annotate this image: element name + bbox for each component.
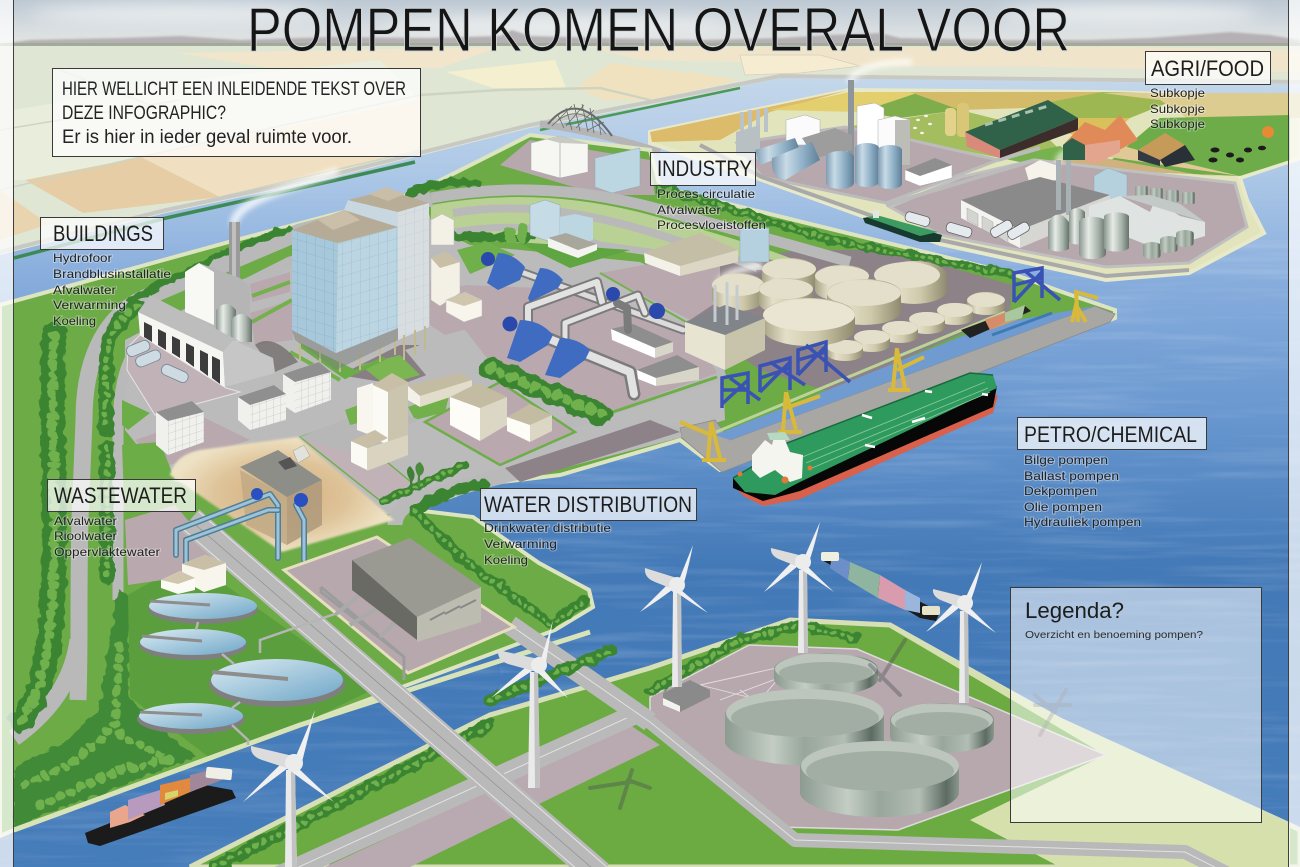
intro text box — [52, 68, 420, 156]
label: agri/food: AGRI/FOOD — [1151, 56, 1264, 81]
jetty quay — [680, 306, 1115, 472]
distant fields — [0, 46, 1300, 306]
small port ship — [961, 305, 1052, 338]
container barge right — [821, 552, 940, 621]
label: wastewater: WASTEWATER — [54, 483, 187, 508]
blocks behind the tower — [431, 214, 482, 322]
label: buildings: Koeling — [53, 314, 96, 328]
intro text box: DEZE INFOGRAPHIC? — [62, 103, 226, 124]
label: buildings: Hydrofoor — [53, 251, 112, 265]
tanker ship — [733, 373, 998, 506]
label: buildings: Afvalwater — [53, 283, 116, 297]
smoke plumes — [234, 62, 1085, 285]
skyline horizon — [0, 30, 1300, 47]
turbine shadows — [590, 640, 1070, 808]
label: agri/food — [1146, 52, 1270, 131]
label: buildings — [40, 218, 171, 328]
pumps and pipes, centre — [481, 252, 699, 394]
label: wastewater: Oppervlaktewater — [54, 545, 160, 559]
green-grey tanks on lower site — [663, 653, 994, 817]
wind turbines — [243, 522, 996, 867]
vented square building — [685, 282, 765, 370]
tower block behind — [344, 187, 429, 360]
yellow port cranes — [680, 292, 1098, 460]
blue pumps — [487, 253, 590, 378]
petrochemical site on the island — [961, 160, 1205, 259]
island trucks and small tanker — [863, 210, 1031, 242]
label: petro/chemical: Bilge pompen — [1024, 453, 1108, 467]
label: industry — [650, 152, 766, 232]
clarifier basins — [137, 593, 352, 745]
inner arc roads — [431, 190, 850, 262]
factory with chimney — [138, 222, 298, 387]
industry tanks on island — [736, 80, 952, 189]
agricultural island — [650, 90, 1300, 280]
label: industry: INDUSTRY — [657, 156, 752, 181]
label: petro/chemical: Hydrauliek pompen — [1024, 515, 1141, 529]
intro text box: Er is hier in ieder geval ruimte voor. — [62, 127, 352, 148]
label: agri/food: Subkopje — [1150, 102, 1205, 116]
label: water distribution: Drinkwater distributie — [484, 521, 611, 535]
main road — [182, 512, 608, 867]
label: petro/chemical: Dekpompen — [1024, 484, 1097, 498]
container barge left — [85, 767, 236, 846]
intro text box: HIER WELLICHT EEN INLEIDENDE TEKST OVER — [62, 79, 406, 100]
label: agri/food: Subkopje — [1150, 86, 1205, 100]
label: petro/chemical: Ballast pompen — [1024, 469, 1119, 483]
arch bridge over the river — [540, 104, 660, 152]
left hedges — [14, 228, 290, 827]
tank farm ground — [690, 250, 1012, 392]
label: wastewater — [48, 480, 196, 559]
pale green arcs — [431, 197, 800, 262]
label: agri/food: Subkopje — [1150, 117, 1205, 131]
mauve ground near wastewater — [125, 505, 230, 585]
label: petro/chemical — [1018, 418, 1206, 529]
label: industry: Procesvloeistoffen — [657, 218, 766, 232]
label: water distribution — [480, 488, 696, 567]
label: buildings: Brandblusinstallatie — [53, 267, 171, 281]
glass tower — [292, 210, 398, 372]
canal hedges — [215, 625, 855, 867]
water distribution building — [284, 537, 514, 680]
legend box: Legenda? — [1025, 598, 1124, 623]
label: industry: Proces circulatie — [657, 187, 755, 201]
label: water distribution: WATER DISTRIBUTION — [484, 492, 692, 517]
legend box — [1010, 588, 1262, 822]
city blocks — [156, 362, 552, 489]
label: petro/chemical: PETRO/CHEMICAL — [1024, 422, 1197, 447]
dense hedge blob — [14, 590, 195, 827]
beige storage tanks — [712, 258, 1005, 361]
label: industry: Afvalwater — [657, 203, 721, 217]
dark mauve aprons — [505, 420, 680, 482]
canal bank and lower land — [14, 620, 1300, 867]
label: buildings: BUILDINGS — [53, 221, 153, 246]
pads — [463, 285, 717, 412]
pads of the industry — [737, 127, 998, 203]
label: water distribution: Verwarming — [484, 537, 557, 551]
wastewater treatment building — [161, 445, 322, 594]
lawn under clarifiers — [128, 560, 372, 758]
sand area — [170, 437, 394, 552]
top white and blue buildings — [530, 136, 769, 276]
label: water distribution: Koeling — [484, 553, 528, 567]
label: buildings: Verwarming — [53, 298, 126, 312]
central road network ground — [125, 225, 725, 515]
blue port cranes — [722, 268, 1060, 408]
label: petro/chemical: Olie pompen — [1024, 500, 1102, 514]
lawns — [457, 242, 515, 274]
legend box: Overzicht en benoeming pompen? — [1025, 629, 1203, 641]
peninsula and centre hedges — [385, 182, 1010, 625]
tanker trucks — [125, 339, 190, 384]
main industrial land — [0, 135, 1115, 836]
label: wastewater: Rioolwater — [54, 529, 117, 543]
label: wastewater: Afvalwater — [54, 514, 117, 528]
sky with clouds — [0, 0, 1300, 46]
low buildings — [611, 324, 699, 386]
farm: silos, barn, farmhouse, animals — [913, 100, 1274, 167]
